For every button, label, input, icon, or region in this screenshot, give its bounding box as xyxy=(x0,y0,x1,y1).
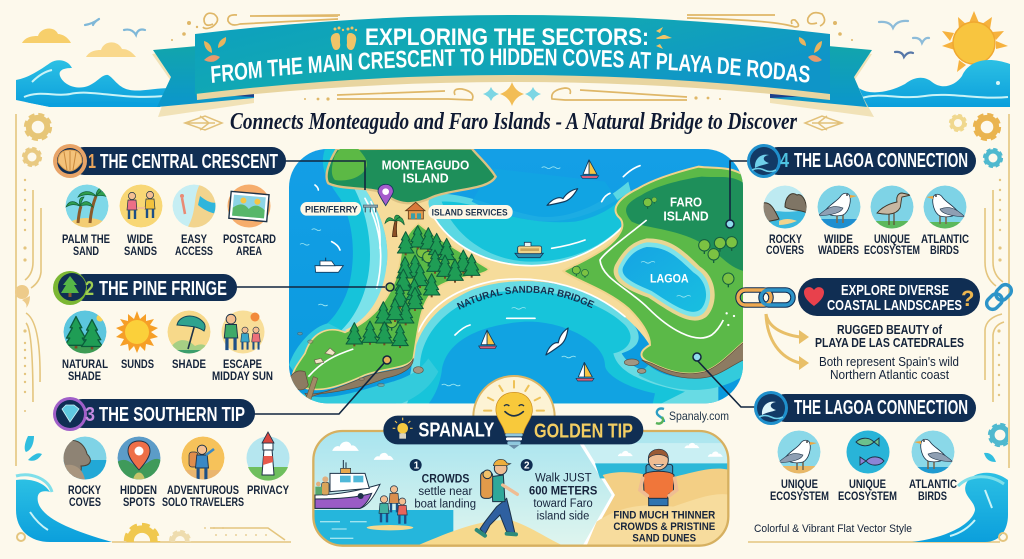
labels row 5: ECOSYSTEM xyxy=(838,491,897,503)
gears xyxy=(23,115,1011,557)
Faro trees xyxy=(572,197,737,287)
pin xyxy=(378,184,393,206)
labels row 1: ACCESS xyxy=(175,246,213,258)
arrows xyxy=(766,314,809,370)
callout text xyxy=(815,323,964,382)
pier xyxy=(363,205,378,212)
wave top right xyxy=(859,60,1010,107)
icon: umbrella xyxy=(167,310,213,355)
find text xyxy=(613,509,716,545)
boat xyxy=(315,460,380,508)
label: Monteagudo Island: MONTEAGUDO xyxy=(382,157,469,172)
icon: waders gull xyxy=(817,186,861,229)
sailboats xyxy=(479,160,599,381)
heading pill 2: THE PINE FRINGE xyxy=(99,278,227,300)
icon: fish xyxy=(846,430,890,474)
label: Monteagudo Island: ISLAND xyxy=(403,171,449,186)
forest xyxy=(346,226,480,348)
heading pill 5 xyxy=(754,391,976,425)
step 2 text: Walk JUST xyxy=(535,471,592,485)
bulb halo xyxy=(473,376,555,457)
clouds top left xyxy=(22,28,136,57)
Monteagudo Island xyxy=(327,148,496,203)
gulls xyxy=(540,189,578,355)
tip heading pill xyxy=(383,416,643,444)
find text: CROWDS & PRISTINE xyxy=(613,521,716,533)
icon: sun xyxy=(116,311,158,353)
connectors xyxy=(235,161,756,414)
hiker smiling xyxy=(640,449,677,506)
labels row 1: PALM THE xyxy=(62,234,110,246)
bottom right wave xyxy=(912,453,1008,542)
spanaly logo: Spanaly.com xyxy=(669,409,729,423)
center stars xyxy=(483,82,541,106)
icon: rocky covers xyxy=(763,186,807,229)
sun xyxy=(942,11,1008,80)
explore pill: EXPLORE DIVERSE xyxy=(841,282,949,299)
label: island services xyxy=(428,205,513,219)
labels row 2 xyxy=(62,359,273,383)
label: natural sandbar bridge: NATURAL SANDBAR BRIDGE xyxy=(456,286,594,310)
icon: beach xyxy=(172,184,216,228)
step 1 text: settle near xyxy=(418,484,472,498)
tip scene xyxy=(313,431,730,547)
labels row 1: EASY xyxy=(181,234,207,246)
wave top left xyxy=(16,60,172,107)
labels row 1: SAND xyxy=(73,246,99,258)
heading pill 2 xyxy=(53,271,237,305)
water ripples xyxy=(300,167,691,386)
step 1 text: CROWDS xyxy=(422,471,469,485)
icon: postcard xyxy=(228,184,270,228)
labels row 3: PRIVACY xyxy=(247,485,289,497)
label: Faro Island: FARO xyxy=(670,196,702,210)
labels row 4: WADERS xyxy=(818,245,859,257)
heading pill 2: 2 xyxy=(85,278,94,300)
callout text: Northern Atlantic coast xyxy=(830,368,949,382)
icon: pines xyxy=(63,310,107,355)
labels row 2: MIDDAY SUN xyxy=(212,371,273,383)
icon: heron xyxy=(870,186,914,229)
heading pill 1: THE CENTRAL CRESCENT xyxy=(100,151,278,173)
heading pill 1: 1 xyxy=(88,151,96,173)
label: island services: ISLAND SERVICES xyxy=(432,208,508,218)
find text: FIND MUCH THINNER xyxy=(613,509,715,521)
step 2 text: 600 METERS xyxy=(529,483,597,497)
step 2 text xyxy=(521,459,597,523)
labels row 2: SUNDS xyxy=(121,359,154,371)
step 1 text xyxy=(410,459,476,511)
labels row 2: SHADE xyxy=(68,371,101,383)
smiling lightbulb xyxy=(496,392,532,449)
sandbar land xyxy=(345,190,649,346)
icon: ecosystem gull xyxy=(777,430,821,474)
find text: SAND DUNES xyxy=(632,533,696,545)
labels row 2: ESCAPE xyxy=(223,359,262,371)
labels row 4 xyxy=(766,234,969,257)
labels row 3: ROCKY xyxy=(68,485,101,497)
rocks xyxy=(283,332,646,397)
labels row 4: ATLANTIC xyxy=(921,234,969,246)
section 3: the southern tip xyxy=(53,397,290,509)
labels row 1 xyxy=(62,234,276,258)
tip heading pill: SPANALY xyxy=(418,420,494,442)
icon: chain right xyxy=(984,282,1014,312)
labels row 3: SPOTS xyxy=(123,497,155,509)
heading pill 3 xyxy=(53,397,255,431)
icon: palms xyxy=(66,184,108,228)
label: Monteagudo Island xyxy=(382,160,469,182)
drop ornament left xyxy=(15,285,30,308)
pine peninsula xyxy=(289,223,489,402)
decorative frame xyxy=(16,114,1009,542)
boat xyxy=(315,258,343,272)
labels row 3 xyxy=(68,485,289,509)
crowd xyxy=(367,486,413,530)
title line 1: EXPLORING THE SECTORS: xyxy=(365,24,649,51)
step 2 text: 2 xyxy=(524,461,530,472)
labels row 2: NATURAL xyxy=(62,359,108,371)
label: pier/ferry xyxy=(300,202,361,216)
labels row 4: ROCKY xyxy=(769,234,802,246)
section 4: the lagoa connection xyxy=(747,144,976,257)
labels row 4: ECOSYSTEM xyxy=(864,245,920,257)
explore pill xyxy=(798,278,980,316)
golden tip panel xyxy=(313,376,730,547)
label: Lagoa: LAGOA xyxy=(650,271,689,285)
callout text: PLAYA DE LAS CATEDRALES xyxy=(815,336,964,350)
step 1 text: 1 xyxy=(414,461,420,472)
labels row 3: HIDDEN xyxy=(120,485,157,497)
step 2 text: island side xyxy=(537,509,590,523)
explore pill: ? xyxy=(961,286,974,311)
labels row 5: UNIQUE xyxy=(849,479,886,491)
section 2: the pine fringe xyxy=(53,271,273,383)
callout text: Both represent Spain's wild xyxy=(819,355,959,369)
labels row 5: ECOSYSTEM xyxy=(770,491,829,503)
water shallows xyxy=(289,149,745,408)
bottom left wave xyxy=(16,436,112,542)
map xyxy=(289,149,743,404)
labels row 4: COVERS xyxy=(766,245,804,257)
labels row 5: ATLANTIC xyxy=(909,479,957,491)
labels row 5: UNIQUE xyxy=(781,479,818,491)
heading pill 1 xyxy=(53,144,286,178)
ferry xyxy=(515,242,543,258)
icon: atlantic gull xyxy=(911,430,955,474)
labels row 5 xyxy=(770,479,957,503)
labels row 1: WIDE xyxy=(127,234,153,246)
icon: family xyxy=(222,310,264,354)
icon: banner leaves left xyxy=(204,37,226,62)
labels row 1: AREA xyxy=(236,246,262,258)
labels row 3: ADVENTUROUS xyxy=(167,485,239,497)
style note: Colorful & Vibrant Flat Vector Style xyxy=(754,523,912,535)
palm xyxy=(385,215,404,237)
icon: atlantic bird xyxy=(923,186,967,229)
labels row 4: BIRDS xyxy=(930,245,959,257)
step 2 text: toward Faro xyxy=(533,496,593,510)
heading pill 3: 3 xyxy=(85,404,95,426)
section 1: the central crescent xyxy=(53,144,286,258)
walker xyxy=(477,459,517,536)
label: Faro Island xyxy=(664,198,708,220)
icon: sparkle xyxy=(656,27,672,49)
labels row 4: WIIDE xyxy=(824,234,853,246)
spanaly logo xyxy=(656,409,729,424)
callout text: RUGGED BEAUTY of xyxy=(837,323,943,337)
heading pill 4 xyxy=(747,144,976,178)
labels row 5: BIRDS xyxy=(918,491,947,503)
heading pill 4: 4 xyxy=(780,150,790,172)
icon: hidden spots xyxy=(117,436,161,480)
icon: couple xyxy=(120,184,162,228)
section 5: the lagoa connection (second) xyxy=(754,391,976,503)
label: Faro Island: ISLAND xyxy=(663,210,709,224)
labels row 1: SANDS xyxy=(124,246,157,258)
explore pill: COASTAL LANDSCAPES xyxy=(827,297,962,314)
icon: banner leaves right xyxy=(799,37,822,62)
labels row 3: COVES xyxy=(69,497,101,509)
ornaments around banner xyxy=(203,13,825,100)
label: pier/ferry: PIER/FERRY xyxy=(305,204,358,214)
labels row 4: UNIQUE xyxy=(874,234,910,246)
labels row 2: SHADE xyxy=(172,359,206,371)
birds top left xyxy=(85,19,145,35)
labels row 3: SOLO TRAVELERS xyxy=(162,497,244,509)
tip heading pill: GOLDEN TIP xyxy=(534,420,633,442)
explore callout xyxy=(738,278,1014,382)
Faro Island xyxy=(563,167,747,378)
title banner xyxy=(152,15,874,117)
icon: rocky coves xyxy=(63,436,107,480)
step 1 text: boat landing xyxy=(414,497,476,511)
subtitle: Connects Monteagudo and Faro Islands - A Natural Bridge to Discover xyxy=(230,109,798,135)
title line 2: FROM THE MAIN CRESCENT TO HIDDEN COVES AT PLAYA DE RODAS xyxy=(211,48,810,83)
surf lines xyxy=(315,166,640,335)
birds top right xyxy=(879,21,929,57)
lagoon xyxy=(614,238,715,321)
heading pill 3: THE SOUTHERN TIP xyxy=(99,404,245,426)
house xyxy=(406,202,425,219)
icon: hiker xyxy=(181,436,225,480)
icon: footprints xyxy=(331,26,357,50)
labels row 1: POSTCARD xyxy=(223,234,276,246)
icon: lighthouse xyxy=(246,432,290,481)
icon: chain left xyxy=(738,290,793,305)
connector end dots xyxy=(383,220,734,364)
